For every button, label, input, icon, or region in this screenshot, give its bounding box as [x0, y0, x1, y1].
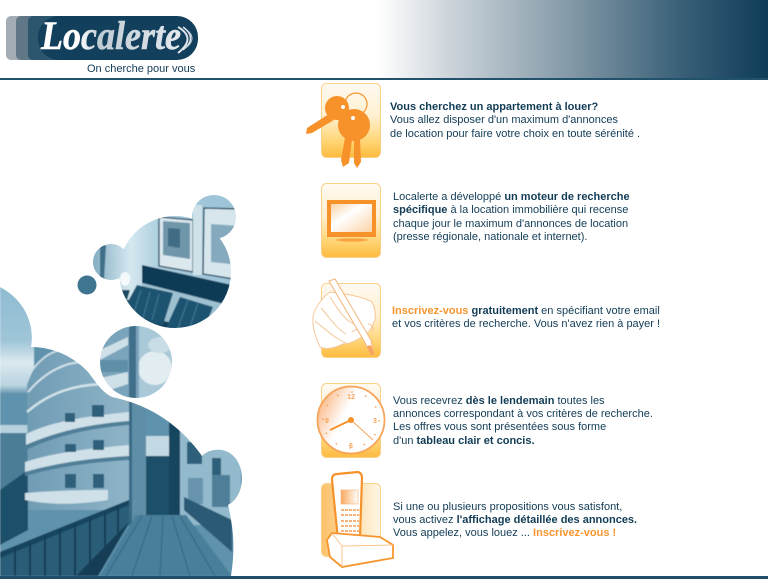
step 1: text: Vous allez disposer d'un maximum d'annonces: [390, 114, 618, 126]
step 4: text: Vous recevrez dès le lendemain toutes les: [393, 394, 605, 406]
step 5: text: vous activez l'affichage détaillée des annonces.: [393, 514, 637, 526]
step 3: text: [392, 304, 660, 330]
step 4: text: Les offres vous sont présentées sous forme: [393, 421, 606, 433]
step 5: text: Vous appelez, vous louez ... Inscrivez-vous !: [393, 527, 616, 539]
bubble: tower and clouds: [100, 326, 172, 398]
header rule: [0, 78, 768, 80]
bubble: building and footbridge: [0, 280, 250, 579]
header gradient band: [0, 0, 768, 78]
bubble: tiny sphere: [78, 276, 96, 294]
step 1: text: [390, 101, 640, 140]
step 3: text: Inscrivez-vous gratuitement en spécifiant votre email: [392, 304, 660, 316]
step 5: text: Si une ou plusieurs propositions vous satisfont,: [393, 500, 622, 512]
step 5: text: [393, 500, 637, 539]
step 2: text: spécifique à la location immobilière qui recense: [393, 204, 628, 216]
step 4: text: d'un tableau clair et concis.: [393, 435, 535, 447]
step 4: text: annonces correspondant à vos critères de recherche.: [393, 408, 653, 420]
step 4: clock icon: 9: [325, 418, 329, 425]
step 4: text: [393, 394, 653, 447]
logo: Localerte: [40, 13, 181, 58]
step 4: clock icon: [316, 383, 386, 458]
step 2: monitor icon: [321, 183, 381, 258]
step 4: clock icon: 12: [347, 394, 355, 401]
footer rule: [0, 576, 768, 579]
step 1: text: de location pour faire votre choix en toute sérénité .: [390, 128, 640, 140]
photo collage: [0, 195, 242, 576]
step 3: text: et vos critères de recherche. Vous n'avez rien à payer !: [392, 318, 660, 330]
step 1: text: Vous cherchez un appartement à louer?: [390, 101, 598, 113]
step 4: clock icon: 6: [349, 443, 353, 450]
step 5: phone icon: [321, 470, 394, 568]
step 1: keys icon: [306, 83, 381, 168]
bubble: bedroom: [93, 195, 236, 328]
step 2: text: (presse régionale, nationale et internet).: [393, 231, 587, 243]
slogan: On cherche pour vous: [87, 63, 195, 75]
step 2: text: Localerte a développé un moteur de recherche: [393, 191, 630, 203]
step 4: clock icon: 3: [373, 418, 377, 425]
step 2: text: chaque jour le maximum d'annonces de location: [393, 218, 628, 230]
step 3: writing hand icon: [312, 278, 381, 358]
step 2: text: [393, 191, 630, 243]
